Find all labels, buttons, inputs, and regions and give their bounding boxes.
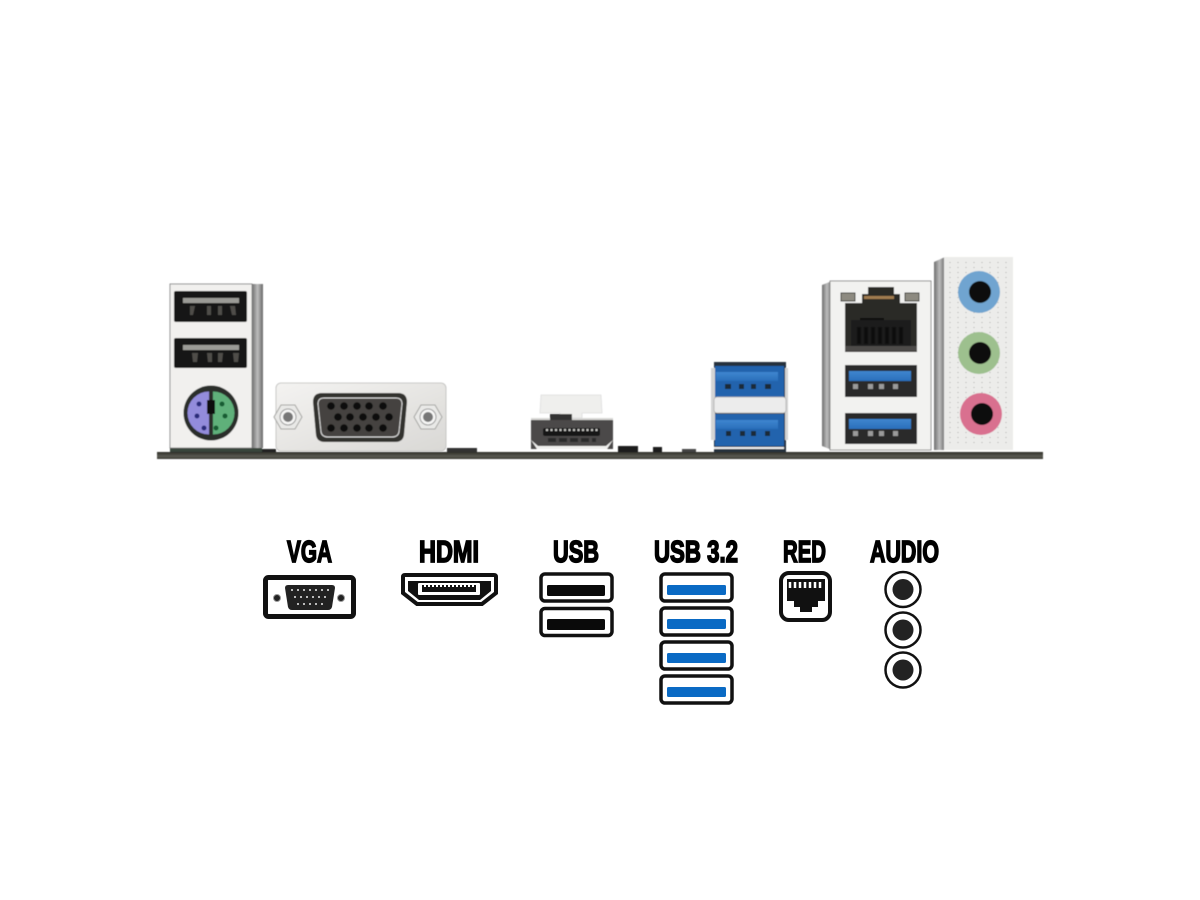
metal side wall [252,284,263,448]
connector body [531,419,613,449]
icon: VGA [266,578,354,616]
icon: HDMI [403,575,496,604]
USB port bottom [174,338,247,368]
top port [715,366,784,397]
legend: HDMI [403,534,496,604]
motherboard I/O photo [157,257,1043,459]
HDMI slot [543,428,600,436]
blue jack [958,271,1000,313]
USB port top [174,291,247,322]
icon: network jack [781,573,830,620]
icon: USB 3.2 port 1 [661,574,732,601]
label: AUDIO [870,534,939,569]
LED right [905,293,919,301]
LED left [841,293,855,301]
label: RED [783,534,826,569]
RJ45 jack [845,287,917,352]
legend: RED [781,534,830,620]
circuit board edge [157,447,1043,459]
legend: USB 3.2 [654,534,738,703]
bottom port [715,414,784,446]
metal side wall [934,257,945,450]
green jack [958,332,1000,374]
port: stacked USB and PS/2 [170,284,263,448]
port: audio jacks [934,257,1013,450]
icon: USB 3.2 port 4 [661,676,732,703]
metal side wall [822,281,832,450]
legend: USB [541,534,612,636]
pink jack [960,393,1002,435]
label: USB 3.2 [654,534,738,569]
screw left [274,405,302,429]
port: stacked blue USB 3.2 [711,362,788,452]
port: HDMI [531,395,613,449]
screw right [414,405,442,429]
legend: VGA [266,534,354,616]
dotted faceplate [944,257,1013,450]
icon: USB bottom [541,608,612,636]
label: HDMI [419,534,479,569]
label: USB [553,534,599,569]
USB 3.2 port bottom [845,413,917,444]
icon: audio jack 1 [886,572,920,607]
icon: audio jack 3 [886,652,920,688]
icon: USB top [541,574,612,601]
white latch [540,395,602,418]
small board components [618,446,662,452]
legend: AUDIO [870,534,939,688]
port: LAN and USB 3.2 stack [822,281,931,450]
icon: USB 3.2 port 2 [661,608,732,635]
D-sub shell [313,393,407,442]
VGA pins [327,402,393,432]
metal plate [276,383,446,451]
icon: audio jack 2 [886,612,920,648]
white faceplate [830,281,931,450]
white faceplate [170,284,252,448]
USB 3.2 port top [845,365,917,397]
port: VGA connector [274,383,446,451]
silver band [714,397,786,413]
PS/2 port [184,386,238,440]
icon: USB 3.2 port 3 [661,642,732,669]
label: VGA [287,534,332,569]
